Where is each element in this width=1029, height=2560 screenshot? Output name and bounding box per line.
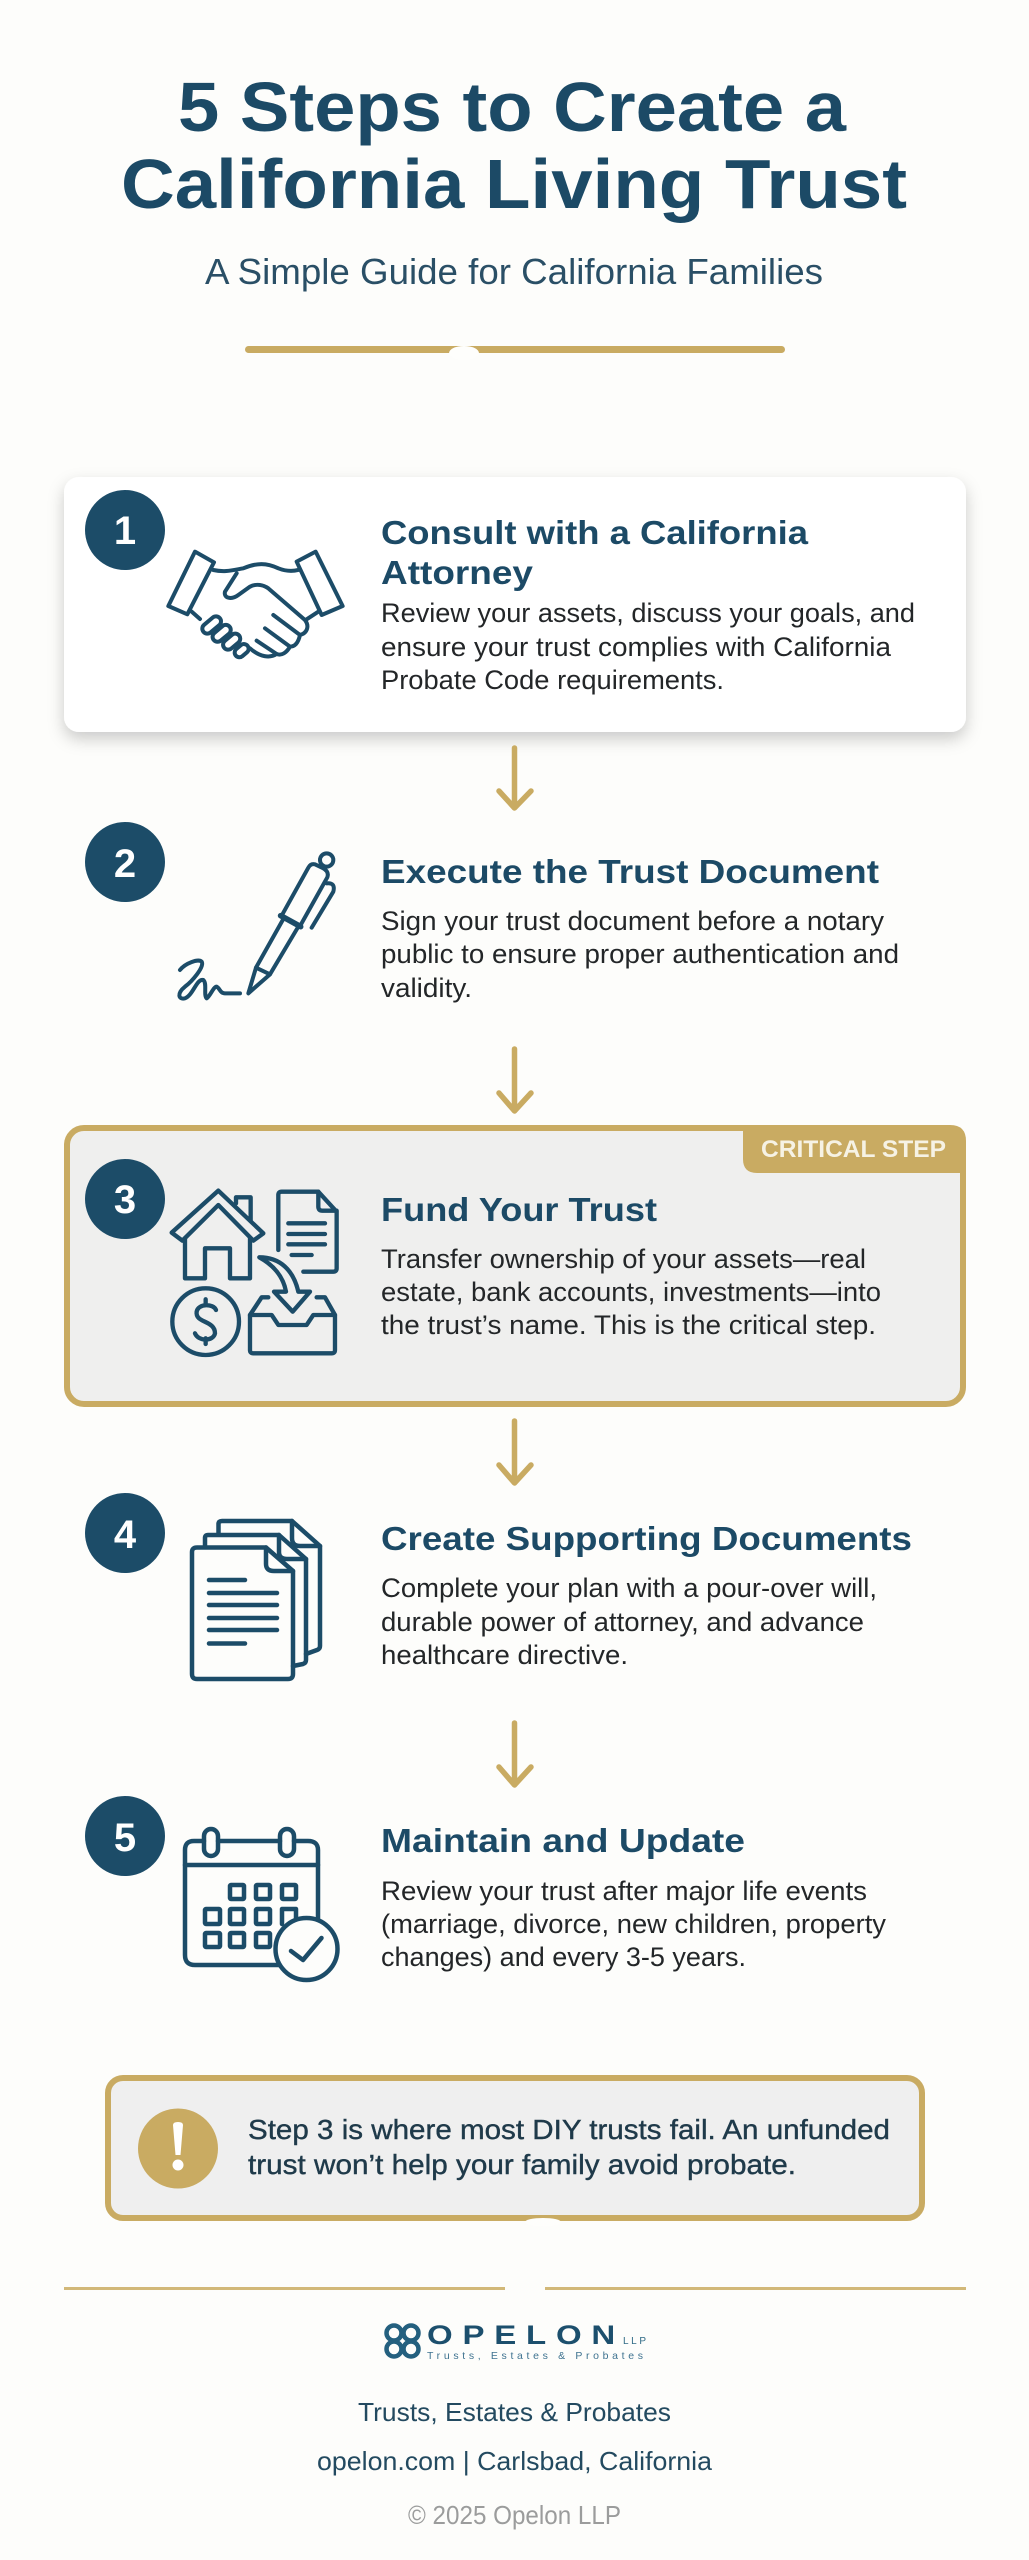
step 2 number: 2 bbox=[114, 842, 136, 886]
arrow 2 to 3 bbox=[499, 1049, 531, 1111]
step 5 text: (marriage, divorce, new children, property bbox=[381, 1909, 886, 1939]
step 2 number bbox=[85, 822, 165, 902]
step 3 text: estate, bank accounts, investments—into bbox=[381, 1277, 881, 1307]
footer divider bbox=[64, 2287, 966, 2290]
step 1 text: ensure your trust complies with California bbox=[381, 632, 892, 662]
arrow 3 to 4 bbox=[499, 1421, 531, 1483]
step 2 text: Sign your trust document before a notary bbox=[381, 906, 885, 936]
step 2 text bbox=[381, 906, 899, 1003]
title: 5 Steps to Create a bbox=[178, 68, 847, 146]
logo tagline: Trusts, Estates & Probates bbox=[427, 2350, 643, 2362]
step 1 number: 1 bbox=[114, 509, 136, 553]
title bbox=[121, 68, 907, 223]
panel: step 2 bbox=[85, 822, 899, 1003]
step 4 heading: Create Supporting Documents bbox=[381, 1520, 912, 1557]
arrow 1 to 2 bbox=[499, 748, 531, 808]
step 1 text: Probate Code requirements. bbox=[381, 665, 724, 695]
step 1 text bbox=[381, 598, 915, 695]
callout text: trust won’t help your family avoid probate. bbox=[248, 2149, 796, 2180]
step 1 text: Review your assets, discuss your goals, and bbox=[381, 598, 915, 628]
step 5 text: Review your trust after major life events bbox=[381, 1876, 867, 1906]
panel: step 1 bbox=[64, 477, 966, 732]
step 2 text: validity. bbox=[381, 973, 472, 1003]
footer tagline: Trusts, Estates & Probates bbox=[358, 2397, 671, 2427]
step 2 text: public to ensure proper authentication and bbox=[381, 939, 899, 969]
step 1 heading: Attorney bbox=[381, 554, 534, 591]
step 4 number: 4 bbox=[114, 1513, 137, 1557]
step 1 heading bbox=[381, 514, 809, 591]
badge: critical step: CRITICAL STEP bbox=[761, 1136, 946, 1163]
callout text bbox=[248, 2114, 890, 2180]
logo knot symbol bbox=[386, 2326, 418, 2356]
step 5 text bbox=[381, 1876, 886, 1972]
copyright: © 2025 Opelon LLP bbox=[408, 2500, 621, 2530]
icon: exclamation bbox=[138, 2108, 218, 2188]
panel: step 3 critical bbox=[67, 1125, 966, 1404]
panel: step 4 bbox=[85, 1493, 912, 1679]
logo suffix: LLP bbox=[623, 2336, 646, 2347]
step 2 heading: Execute the Trust Document bbox=[381, 853, 879, 890]
footer contact: opelon.com | Carlsbad, California bbox=[317, 2446, 713, 2476]
title: California Living Trust bbox=[121, 145, 907, 223]
step 4 text bbox=[381, 1573, 877, 1670]
step 3 text: Transfer ownership of your assets—real bbox=[381, 1244, 866, 1274]
icon: pen and signature bbox=[179, 853, 334, 999]
step 4 number bbox=[85, 1493, 165, 1573]
step 1 number bbox=[85, 490, 165, 570]
title divider bbox=[245, 346, 785, 360]
icon: calendar with check bbox=[185, 1829, 338, 1980]
subtitle: A Simple Guide for California Families bbox=[205, 251, 823, 292]
panel: step 5 bbox=[85, 1796, 886, 1980]
logo wordmark: OPELON bbox=[427, 2320, 625, 2350]
icon: house, document, money and inbox bbox=[172, 1191, 337, 1355]
step 3 text bbox=[381, 1244, 881, 1340]
arrow 4 to 5 bbox=[499, 1723, 531, 1785]
step 1 heading: Consult with a California bbox=[381, 514, 809, 551]
step 5 text: changes) and every 3-5 years. bbox=[381, 1942, 746, 1972]
step 4 text: durable power of attorney, and advance bbox=[381, 1607, 864, 1637]
step 3 text: the trust’s name. This is the critical step. bbox=[381, 1310, 876, 1340]
callout: step 3 warning bbox=[108, 2078, 922, 2226]
icon: stacked documents bbox=[192, 1521, 320, 1679]
step 4 text: Complete your plan with a pour-over will, bbox=[381, 1573, 877, 1603]
badge: critical step bbox=[743, 1125, 966, 1173]
step 3 number: 3 bbox=[114, 1178, 136, 1222]
step 4 text: healthcare directive. bbox=[381, 1640, 628, 1670]
step 5 heading: Maintain and Update bbox=[381, 1822, 745, 1859]
logo: Opelon LLP bbox=[386, 2320, 646, 2362]
step 3 heading: Fund Your Trust bbox=[381, 1191, 657, 1228]
step 5 number: 5 bbox=[114, 1816, 136, 1860]
step 5 number bbox=[85, 1796, 165, 1876]
callout text: Step 3 is where most DIY trusts fail. An unfunded bbox=[248, 2114, 890, 2145]
step 3 number bbox=[85, 1159, 165, 1239]
icon: handshake bbox=[168, 552, 343, 659]
